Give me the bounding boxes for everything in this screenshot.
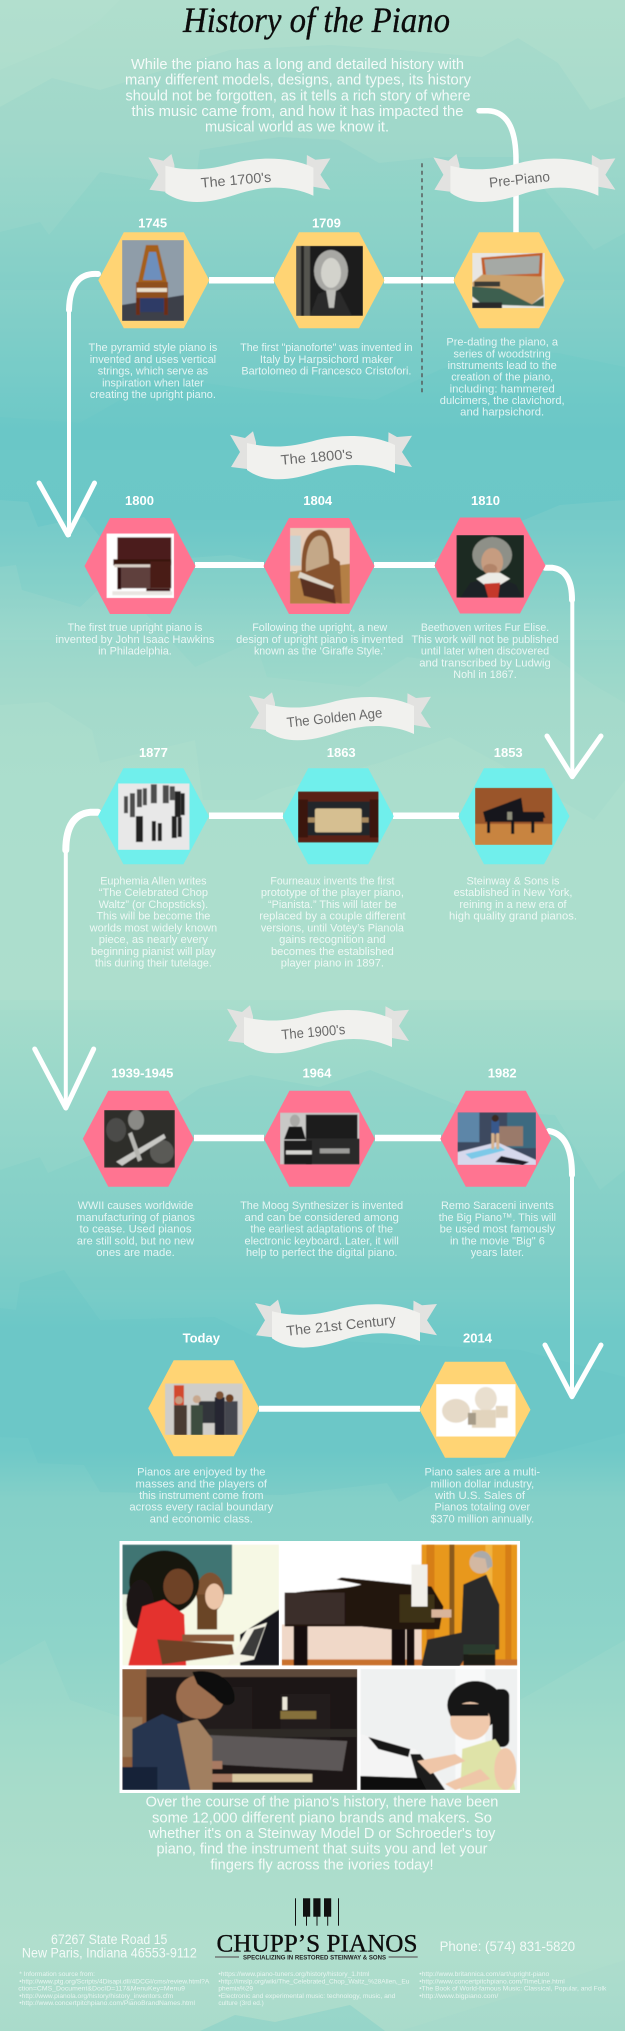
description: across every racial boundary	[129, 1502, 274, 1514]
description: creating the upright piano.	[90, 389, 216, 401]
description	[440, 337, 565, 419]
description	[439, 1200, 556, 1259]
intro text: musical world as we know it.	[205, 119, 389, 135]
description: dulcimers, the clavichord,	[440, 395, 565, 407]
description: the Big Piano™. This will	[439, 1212, 556, 1224]
description: known as the ‘Giraffe Style.’	[254, 646, 385, 658]
description: Pianos totaling over	[434, 1502, 530, 1514]
description: Pianos are enjoyed by the	[137, 1467, 265, 1479]
description: Pre-dating the piano, a	[446, 337, 559, 349]
sources: column 1: * Information source from:	[19, 1971, 95, 1978]
description: be used most famously	[440, 1224, 556, 1236]
banner: Pre-Piano	[433, 154, 615, 202]
description: invented and uses vertical	[90, 354, 216, 366]
description: manufacturing of pianos	[76, 1212, 195, 1224]
description: creation of the piano,	[451, 372, 553, 384]
hexagon photo: player piano roll	[283, 768, 394, 864]
sources: column 1: •http://www.ptg.org/Scripts/4Disapi.dll/4DCGI/cms/review.html?A	[19, 1978, 210, 1985]
event: 1853: 1853	[494, 745, 523, 760]
description	[240, 1200, 403, 1259]
event: 1810: 1810	[471, 493, 500, 508]
photo: man in hat at upright piano	[122, 1669, 358, 1790]
description: help to perfect the digital piano.	[246, 1247, 397, 1259]
description: design of upright piano is invented	[236, 634, 403, 646]
description: years later.	[471, 1247, 524, 1259]
event: 1709: 1709	[312, 215, 341, 230]
description	[89, 875, 217, 970]
description: “The Celebrated Chop	[99, 887, 208, 899]
banner: Pre-Piano: Pre-Piano	[488, 168, 551, 190]
description: prototype of the player piano,	[261, 887, 404, 899]
sources: column 2: •Electronic and experimental music: technology, music, and	[218, 1993, 396, 2000]
description: and economic class.	[150, 1513, 253, 1525]
title: History of the Piano	[182, 0, 450, 40]
description	[236, 622, 403, 658]
event: 1964	[240, 1065, 403, 1259]
banner: The 1800's: The 1800's	[280, 446, 353, 468]
icon: piano keys	[295, 1898, 339, 1926]
description: Following the upright, a new	[252, 622, 387, 634]
sources: column 3	[419, 1971, 607, 2000]
description: Waltz” (or Chopsticks).	[99, 899, 208, 911]
description: and harpsichord.	[460, 407, 544, 419]
description: becomes the established	[271, 946, 394, 958]
description: Piano sales are a multi-	[424, 1467, 540, 1479]
event: 1804: 1804	[303, 493, 333, 508]
description: The Moog Synthesizer is invented	[240, 1200, 403, 1212]
closing text: piano, find the instrument that suits you and let your	[156, 1842, 488, 1858]
hexagon photo: Beethoven	[434, 518, 546, 614]
description: million dollar industry,	[430, 1478, 534, 1490]
sources: column 1: ction=CMS_Document&DocID=117&MenuKey=Menu9	[18, 1986, 185, 1993]
hexagon photo: upright piano	[84, 518, 196, 614]
description: replaced by a couple different	[259, 911, 406, 923]
description: in the movie "Big" 6	[450, 1235, 545, 1247]
sources: column 1: •http://www.concertpitchpiano.com/PianoBrandNames.html	[19, 2000, 195, 2007]
description: The pyramid style piano is	[89, 342, 218, 354]
connector arrow: 1800s to golden age	[545, 568, 601, 777]
description	[424, 1467, 540, 1525]
banner: The Golden Age	[249, 692, 431, 740]
address	[22, 1932, 197, 1960]
hexagon photo: WWII bomber	[83, 1091, 194, 1187]
hexagon photo: toy pigs at piano	[420, 1362, 530, 1458]
event: 2014: 2014	[463, 1331, 493, 1346]
event: Today: Today	[183, 1331, 221, 1346]
sources: column 3: •http://www.concertpitchpiano.com/TimeLine.html	[419, 1978, 565, 1985]
phone: Phone: (574) 831-5820	[440, 1939, 575, 1954]
sources: column 2: culture (3rd ed.)	[218, 2000, 264, 2007]
description: “Pianista.” This will later be	[268, 899, 397, 911]
description: Bartolomeo di Francesco Cristofori.	[241, 366, 411, 378]
description	[129, 1467, 274, 1525]
sources: column 3: •http://www.britannica.com/art/upright-piano	[419, 1971, 550, 1978]
event: 1939-1945: 1939-1945	[111, 1065, 173, 1080]
photo collage	[120, 1541, 520, 1793]
event: 1853	[449, 745, 577, 923]
description: in Philadelphia.	[98, 646, 172, 658]
description: The first "pianoforte" was invented in	[240, 342, 412, 354]
photo: girls at keyboard	[122, 1544, 279, 1666]
description: Beethoven writes Fur Elise.	[421, 622, 549, 634]
description: high quality grand pianos.	[449, 911, 577, 923]
sources: column 1: •http://www.pianola.org/history/history_inventors.cfm	[19, 1993, 173, 2000]
banner: The 21st Century: The 21st Century	[286, 1311, 397, 1339]
description: this during their tutelage.	[95, 958, 212, 970]
connector: intro to pre-piano	[479, 111, 516, 232]
description: This work will not be published	[412, 634, 558, 646]
sources: column 2	[218, 1971, 410, 2007]
banner: The Golden Age: The Golden Age	[286, 704, 383, 730]
description: reining in a new era of	[459, 899, 568, 911]
description: gains recognition and	[279, 934, 386, 946]
event: 2014	[420, 1331, 540, 1525]
banner: The 1700's	[148, 154, 330, 202]
description: to cease. Used pianos	[80, 1224, 192, 1236]
banner: The 1800's	[230, 431, 412, 479]
description: Remo Saraceni invents	[441, 1200, 554, 1212]
sources: column 1	[18, 1971, 210, 2007]
connector arrow: golden age to 1900s	[35, 812, 98, 1108]
address: 67267 State Road 15	[51, 1932, 167, 1947]
sources: column 2: •https://www.piano-tuners.org/history/history_1.html	[218, 1971, 369, 1978]
description: including: hammered	[450, 383, 555, 395]
event: 1804	[236, 493, 403, 658]
hexagon photo: Cristofori portrait	[274, 232, 384, 328]
hexagon photo: Big Piano	[440, 1091, 551, 1187]
description	[56, 622, 215, 658]
photo: girl at piano	[360, 1669, 517, 1790]
closing text: whether it's on a Steinway Model D or Schroeder's toy	[148, 1826, 496, 1842]
event: 1939-1945	[76, 1065, 195, 1259]
sources: column 3: •http://www.bigpiano.com/	[419, 1993, 499, 2000]
description: Steinway & Sons is	[467, 875, 560, 887]
banner: The 1700's: The 1700's	[200, 169, 272, 191]
description: instruments lead to the	[448, 360, 557, 372]
event: 1745	[89, 215, 218, 401]
description: WWII causes worldwide	[78, 1200, 193, 1212]
banner: The 1900's	[227, 1005, 409, 1053]
event: 1964: 1964	[302, 1065, 332, 1080]
description: electronic keyboard. Later, it will	[245, 1235, 399, 1247]
closing text: fingers fly across the ivories today!	[210, 1857, 434, 1873]
banner: The 1900's: The 1900's	[281, 1021, 346, 1042]
intro text: this music came from, and how it has impacted the	[132, 104, 464, 120]
logo: Chupp's Pianos	[215, 1898, 418, 1961]
description: invented by John Isaac Hawkins	[56, 634, 215, 646]
event: 1810	[412, 493, 558, 681]
description: Fourneaux invents the first	[270, 875, 394, 887]
hexagon photo: dancers sketch	[98, 768, 209, 864]
divider: dashed era separator	[421, 163, 423, 393]
event: 1863: 1863	[327, 745, 356, 760]
intro text: While the piano has a long and detailed history with	[131, 57, 464, 73]
description: The first true upright piano is	[68, 622, 203, 634]
hexagon photo: Moog synthesizer	[264, 1091, 375, 1187]
description: series of woodstring	[454, 348, 551, 360]
timeline lines: 1800s row	[195, 562, 435, 568]
banner: The 21st Century	[255, 1300, 437, 1348]
event: 1877: 1877	[139, 745, 168, 760]
event: 1982	[439, 1065, 556, 1259]
description: and transcribed by Ludwig	[419, 657, 551, 669]
sources: column 2: phemia%29	[218, 1986, 254, 1993]
event: 1745: 1745	[138, 215, 167, 230]
intro text: should not be forgotten, as it tells a rich story of where	[126, 88, 470, 104]
description: player piano in 1897.	[281, 958, 384, 970]
photo: man at grand piano	[282, 1544, 518, 1666]
intro text	[125, 57, 472, 135]
description	[240, 342, 412, 378]
hexagon photo: giraffe piano	[264, 518, 374, 614]
event: 1709	[240, 215, 412, 378]
description: until later when discovered	[421, 646, 549, 658]
description	[89, 342, 218, 401]
timeline line: 21st century row	[259, 1406, 420, 1412]
description: and can be considered among	[245, 1212, 399, 1224]
event: pre-piano	[440, 232, 565, 419]
description: the earliest adaptations of the	[250, 1224, 393, 1236]
description: piece, as nearly every	[99, 934, 209, 946]
description: ones are made.	[96, 1247, 175, 1259]
event: 1800: 1800	[125, 493, 154, 508]
timeline lines: 1900s row	[194, 1135, 441, 1141]
description: masses and the players of	[136, 1478, 268, 1490]
logo: Chupp's Pianos: CHUPP’S PIANOS	[216, 1930, 418, 1957]
description: This will be become the	[96, 911, 210, 923]
hexagon photo: Steinway grand	[458, 768, 570, 864]
description	[412, 622, 558, 681]
event: 1877	[89, 745, 217, 970]
sources: column 3: •The Book of World-famous Music: Classical, Popular, and Folk	[419, 1986, 607, 1993]
description: beginning pianist will play	[91, 946, 216, 958]
hexagon photo: pyramid piano	[98, 232, 209, 328]
description: versions, until Votey’s Pianola	[261, 922, 405, 934]
logo: Chupp's Pianos: SPECIALIZING IN RESTORED STEINWAY & SONS	[243, 1955, 386, 1961]
description: Euphemia Allen writes	[100, 875, 207, 887]
closing text: some 12,000 different piano brands and makers. So	[152, 1810, 492, 1826]
hexagon photo: street pianists	[148, 1360, 259, 1456]
description: strings, which serve as	[98, 366, 209, 378]
description	[76, 1200, 195, 1259]
description: $370 million annually.	[430, 1513, 534, 1525]
description: established in New York,	[454, 887, 572, 899]
connector arrow: 1900s to 21st century	[545, 1131, 601, 1397]
intro text: many different models, designs, and types, its history	[125, 73, 472, 89]
description: this instrument come from	[139, 1490, 264, 1502]
description: are still sold, but no new	[77, 1235, 194, 1247]
description: with U.S. Sales of	[434, 1490, 526, 1502]
closing text	[146, 1795, 498, 1873]
description: worlds most widely known	[89, 922, 217, 934]
description: inspiration when later	[102, 377, 204, 389]
event: 1863	[259, 745, 406, 970]
event: Today	[129, 1331, 274, 1525]
timeline lines: 1700s row	[209, 277, 454, 284]
hexagon photo: clavichord	[454, 232, 564, 328]
description	[259, 875, 406, 970]
timeline lines: golden age row	[209, 812, 459, 819]
description: Nohl in 1867.	[453, 669, 517, 681]
description	[449, 875, 577, 923]
connector arrow: 1700s to 1800s	[39, 274, 98, 535]
address: New Paris, Indiana 46553-9112	[22, 1945, 197, 1960]
sources: column 2: •http://imslp.org/wiki/The_Celebrated_Chop_Waltz_%28Allen,_Eu	[218, 1978, 410, 1985]
description: Italy by Harpsichord maker	[260, 354, 393, 366]
closing text: Over the course of the piano's history, there have been	[146, 1795, 498, 1811]
event: 1982: 1982	[488, 1065, 517, 1080]
event: 1800	[56, 493, 215, 658]
